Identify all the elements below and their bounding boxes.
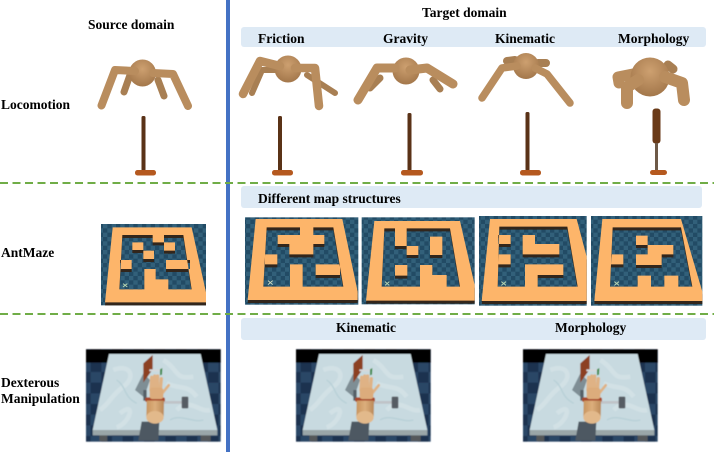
vertical divider <box>226 0 230 452</box>
label: different map structures: Different map structures <box>258 191 401 206</box>
hopper: source <box>135 116 156 176</box>
label: kinematic: Kinematic <box>336 320 396 335</box>
ant: kinematic <box>482 53 570 103</box>
ant: friction <box>243 56 335 106</box>
label: gravity: Gravity <box>383 31 428 46</box>
band: different map structures <box>241 186 702 208</box>
scene: morphology hand <box>523 349 658 442</box>
maze: variation 4 <box>591 216 702 306</box>
ant: morphology <box>618 58 684 103</box>
scene: kinematic hand <box>296 349 431 442</box>
heading: source domain: Source domain <box>88 17 175 32</box>
hopper: friction <box>272 116 293 176</box>
maze: source <box>101 224 206 305</box>
scene: source hand <box>86 349 221 442</box>
label: kinematic: Kinematic <box>495 31 555 46</box>
maze: variation 1 <box>245 217 358 305</box>
heading: target domain: Target domain <box>422 5 507 20</box>
row label: antmaze: AntMaze <box>1 245 54 260</box>
hopper: morphology <box>650 108 667 175</box>
row label: dexterous manipulation: Manipulation <box>1 391 80 406</box>
ant: source <box>102 60 188 106</box>
maze: variation 2 <box>362 217 475 304</box>
row label: locomotion: Locomotion <box>1 97 70 112</box>
hopper: gravity <box>401 113 423 176</box>
label: friction: Friction <box>258 31 305 46</box>
row label: dexterous manipulation: Dexterous <box>1 375 59 390</box>
ant: gravity <box>358 58 453 100</box>
band: locomotion target variations <box>241 27 706 47</box>
band: manipulation target variations <box>241 318 706 340</box>
maze: variation 3 <box>479 216 587 306</box>
label: morphology: Morphology <box>555 320 627 335</box>
separator: locomotion and antmaze <box>0 182 714 184</box>
hopper: kinematic <box>520 112 541 176</box>
label: morphology: Morphology <box>618 31 690 46</box>
separator: antmaze and manipulation <box>0 313 714 315</box>
